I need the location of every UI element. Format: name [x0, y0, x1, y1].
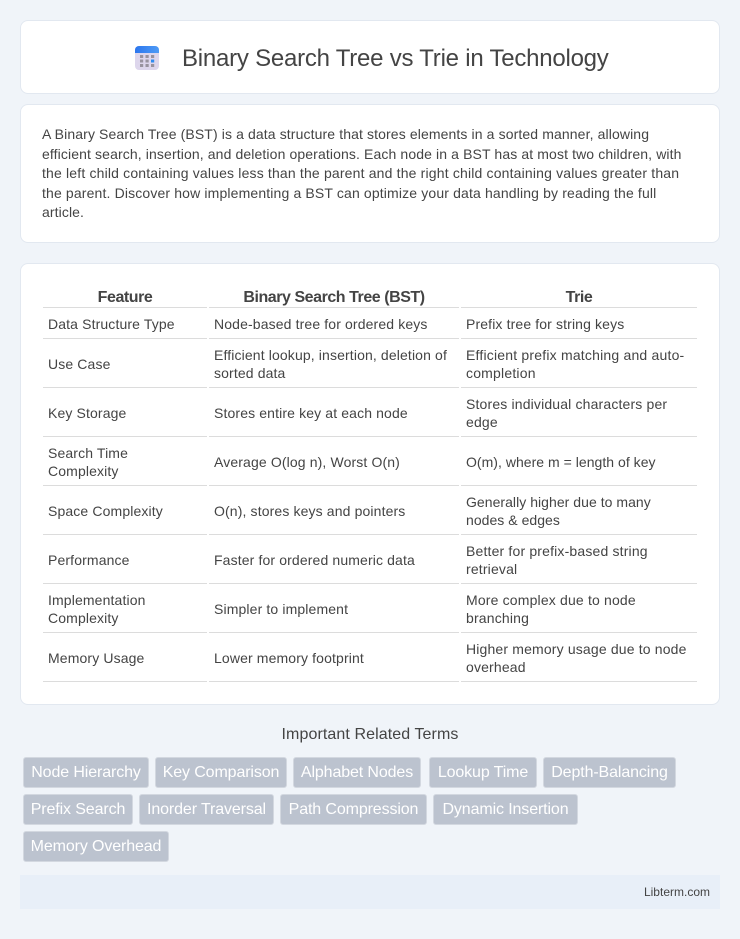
- comparison table: Lower memory footprint: [214, 650, 364, 666]
- comparison table: Search Time: [48, 445, 128, 461]
- related terms tags: Lookup Time: [438, 764, 528, 781]
- comparison table: O(n), stores keys and pointers: [214, 503, 405, 519]
- related terms tags: Key Comparison: [163, 764, 279, 781]
- related terms tags: Depth-Balancing: [551, 764, 668, 781]
- comparison table: Average O(log n), Worst O(n): [214, 454, 400, 470]
- related terms tags: [23, 757, 676, 862]
- related terms heading: Important Related Terms: [282, 726, 458, 743]
- related terms tags: Inorder Traversal: [147, 801, 266, 818]
- comparison table: nodes & edges: [466, 512, 560, 528]
- comparison table: Trie: [566, 289, 592, 306]
- related terms tags: Alphabet Nodes: [301, 764, 413, 781]
- comparison table: branching: [466, 610, 529, 626]
- comparison table: Memory Usage: [48, 650, 144, 666]
- comparison table: retrieval: [466, 561, 517, 577]
- comparison table: edge: [466, 414, 498, 430]
- intro text: efficient search, insertion, and deletion operations. Each node in a BST has at most two children, with: [42, 146, 682, 162]
- intro text: the parent. Discover how implementing a BST can optimize your data handling by reading the full: [42, 185, 656, 201]
- comparison table: [43, 289, 697, 682]
- intro panel: [20, 104, 720, 243]
- comparison table: Performance: [48, 552, 130, 568]
- comparison table: Node-based tree for ordered keys: [214, 316, 428, 332]
- footer link: Libterm.com: [644, 885, 710, 899]
- comparison table: Feature: [98, 289, 152, 306]
- comparison table: Stores entire key at each node: [214, 405, 408, 421]
- comparison table: Stores individual characters per: [466, 396, 667, 412]
- comparison table: Space Complexity: [48, 503, 163, 519]
- comparison table: Better for prefix-based string: [466, 543, 648, 559]
- comparison table: More complex due to node: [466, 592, 636, 608]
- intro text: article.: [42, 204, 84, 220]
- comparison table: overhead: [466, 659, 526, 675]
- comparison table: Data Structure Type: [48, 316, 175, 332]
- comparison table: Use Case: [48, 356, 111, 372]
- related terms tags: Node Hierarchy: [31, 764, 141, 781]
- comparison table: Faster for ordered numeric data: [214, 552, 415, 568]
- comparison table: Complexity: [48, 463, 119, 479]
- icon: calendar grid: [135, 46, 159, 70]
- comparison table: completion: [466, 365, 536, 381]
- comparison table: Efficient prefix matching and auto-: [466, 347, 684, 363]
- comparison table: Key Storage: [48, 405, 126, 421]
- comparison table: Prefix tree for string keys: [466, 316, 624, 332]
- comparison table: O(m), where m = length of key: [466, 454, 656, 470]
- intro text: A Binary Search Tree (BST) is a data structure that stores elements in a sorted manner, allowing: [42, 126, 649, 142]
- related terms tags: Prefix Search: [31, 801, 125, 818]
- comparison table: Binary Search Tree (BST): [243, 289, 425, 306]
- title: Binary Search Tree vs Trie in Technology: [182, 45, 609, 72]
- related terms tags: Path Compression: [289, 801, 418, 818]
- comparison table: Complexity: [48, 610, 119, 626]
- comparison table: Efficient lookup, insertion, deletion of: [214, 347, 447, 363]
- comparison table: Higher memory usage due to node: [466, 641, 687, 657]
- intro text: [42, 126, 682, 220]
- intro text: the left child containing values less than the parent and the right child containing values greater than: [42, 165, 679, 181]
- comparison table: Generally higher due to many: [466, 494, 651, 510]
- table panel: [20, 263, 720, 705]
- comparison table: Simpler to implement: [214, 601, 348, 617]
- related terms tags: Memory Overhead: [31, 838, 161, 855]
- comparison table: sorted data: [214, 365, 285, 381]
- related terms tags: Dynamic Insertion: [442, 801, 568, 818]
- header card: [20, 20, 720, 94]
- footer bar: [20, 875, 720, 909]
- comparison table: Implementation: [48, 592, 146, 608]
